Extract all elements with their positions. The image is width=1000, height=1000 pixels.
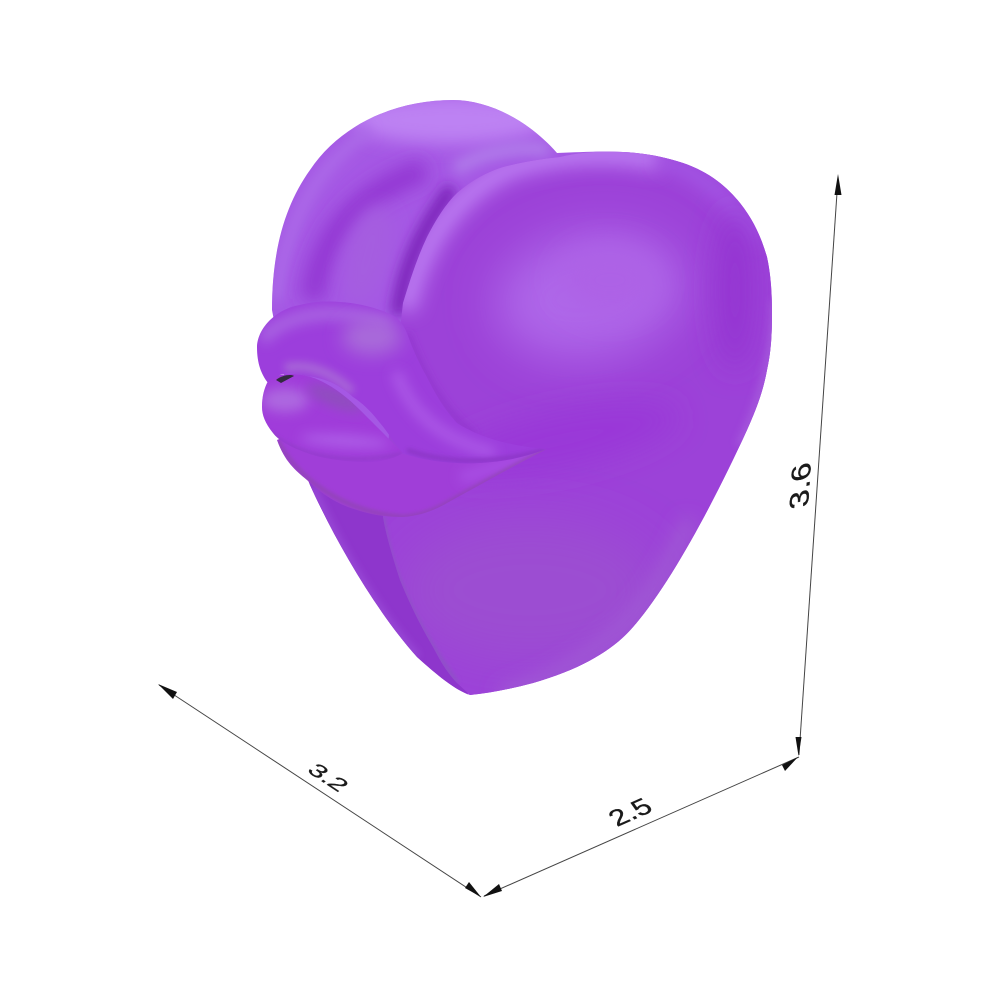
arrow line [796,174,842,756]
upper lip [257,302,545,464]
mouth opening [276,375,294,383]
tongue [262,374,398,459]
label: 2.5 [602,793,658,831]
lower left lobe [308,482,468,694]
dimension: width 2.5 [483,757,799,897]
dimension: height 3.6 [785,174,842,756]
bottom lip [277,439,546,517]
cleft highlight [383,517,457,683]
illustration: purple heart with lips [250,90,790,710]
heart back lobe [272,100,772,695]
shadow under upper lip [410,338,468,426]
heart front lobe [383,152,772,695]
label: 3.6 [785,459,817,512]
dimension: depth 3.2 [158,684,481,897]
label: 3.2 [302,760,354,796]
arrow line [483,757,799,897]
arrow line [158,684,481,897]
lips [257,302,546,517]
